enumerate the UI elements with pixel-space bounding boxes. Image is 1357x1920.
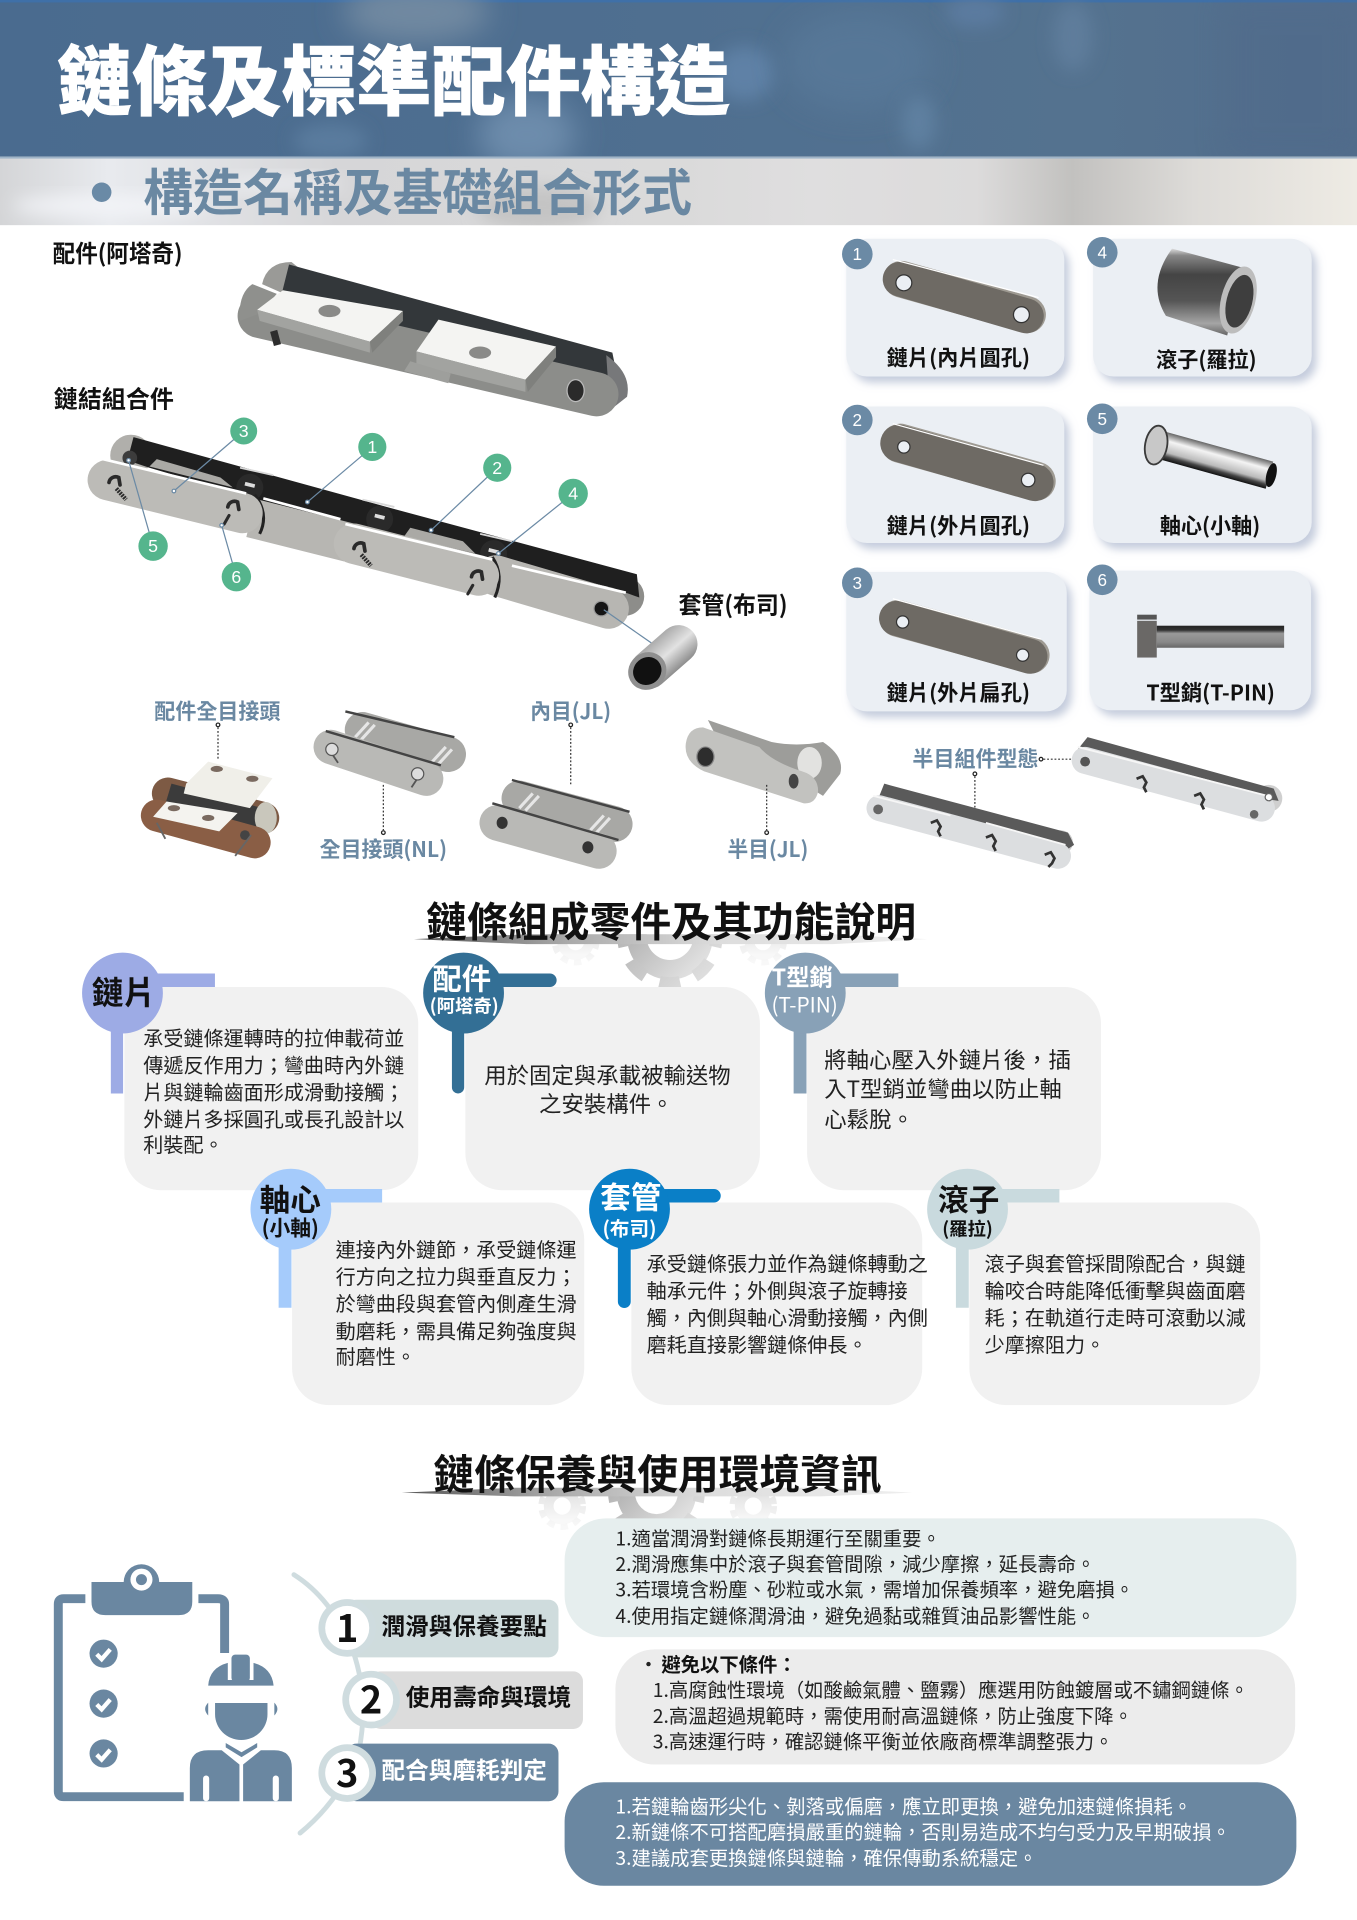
feature card: attachment: (阿塔奇) <box>430 993 499 1019</box>
feature card: T-pin: T型銷 <box>772 959 833 993</box>
info panel: avoid conditions <box>615 1649 1295 1764</box>
card 4: 4 <box>1097 242 1107 262</box>
card 5 <box>1087 403 1312 543</box>
label: assembly: 鏈結組合件 <box>54 380 174 415</box>
info panel: avoid conditions: 避免以下條件： <box>661 1649 797 1677</box>
feature card: chain plate: 傳遞反作用力；彎曲時內外鏈 <box>143 1050 404 1079</box>
section 2 underline <box>414 934 927 944</box>
feature card: bushing: 觸，內側與軸心滑動接觸，內側 <box>647 1302 928 1331</box>
feature card: chain plate: 片與鏈輪齒面形成滑動接觸； <box>143 1077 404 1106</box>
callout numbers: 4 <box>568 484 578 504</box>
icon: clipboard and worker <box>58 1564 292 1801</box>
item 3: 配合與磨耗判定 <box>382 1752 547 1786</box>
feature card: bushing: 軸承元件；外側與滾子旋轉接 <box>647 1275 908 1304</box>
header banner <box>0 0 1357 171</box>
info panel: replacement: 1.若鏈輪齒形尖化、剝落或偏磨，應立即更換，避免加速鏈條損耗。 <box>615 1791 1192 1819</box>
item 1: 潤滑與保養要點 <box>382 1608 547 1642</box>
part: attachment full joint <box>153 762 277 856</box>
info panel: replacement <box>565 1782 1296 1886</box>
item 3 <box>318 1743 558 1802</box>
section 2 heading: 鏈條組成零件及其功能說明 <box>426 890 916 949</box>
info panel: lubrication: 3.若環境含粉塵、砂粒或水氣，需增加保養頻率，避免磨損。 <box>615 1575 1134 1603</box>
label: half link assemblies: 半目組件型態 <box>912 743 1039 774</box>
label: half link assemblies <box>912 743 1073 808</box>
card 5: 5 <box>1097 409 1107 429</box>
info panel: lubrication <box>565 1518 1296 1637</box>
feature card: T-pin: (T-PIN) <box>771 989 838 1019</box>
part: half link chain right <box>1078 737 1282 819</box>
info panel: avoid conditions: 3.高速運行時，確認鏈條平衡並依廠商標準調整張力。 <box>653 1727 1113 1755</box>
feature card: attachment: 配件 <box>432 956 491 998</box>
info panel: avoid conditions: 1.高腐蝕性環境（如酸鹼氣體、鹽霧）應選用防蝕鍍層或不鏽鋼鏈條。 <box>653 1675 1249 1703</box>
feature card: bushing: 套管 <box>600 1173 661 1218</box>
feature card: T-pin <box>765 953 1101 1190</box>
section 3 underline <box>402 1488 912 1496</box>
feature card: pin: 動磨耗，需具備足夠強度與 <box>336 1315 577 1344</box>
section 3 heading: 鏈條保養與使用環境資訊 <box>434 1442 882 1501</box>
card 4: 滾子(羅拉) <box>1156 343 1257 374</box>
feature card: pin: 於彎曲段與套管內側產生滑 <box>336 1288 577 1317</box>
item 3: 3 <box>336 1743 358 1798</box>
part: half link JL <box>686 720 841 803</box>
card 2: 鏈片(外片圓孔) <box>887 509 1030 540</box>
label: inner link JL <box>530 695 611 785</box>
cards panel <box>842 237 1312 711</box>
feature card: chain plate: 外鏈片多採圓孔或長孔設計以 <box>143 1104 404 1133</box>
card 6 <box>1087 564 1311 710</box>
feature card: T-pin: 入T型銷並彎曲以防止軸 <box>824 1072 1062 1104</box>
info panel: lubrication: 1.適當潤滑對鏈條長期運行至關重要。 <box>615 1523 941 1551</box>
card 3 <box>842 568 1067 711</box>
label: attachment full joint <box>154 695 281 759</box>
item 2: 使用壽命與環境 <box>406 1679 571 1713</box>
label: attachment full joint: 配件全目接頭 <box>154 695 281 726</box>
item 1: 1 <box>336 1598 358 1653</box>
card 1 <box>842 239 1064 377</box>
subtitle band <box>0 157 1357 230</box>
subtitle: 構造名稱及基礎組合形式 <box>143 154 692 226</box>
callout numbers: 3 <box>239 421 249 441</box>
label: inner link JL: 內目(JL) <box>530 695 611 726</box>
feature card: roller <box>927 1169 1260 1405</box>
feature card: attachment <box>423 953 760 1190</box>
card 3: 3 <box>853 573 862 593</box>
subtitle bullet <box>92 182 111 202</box>
item 2: 2 <box>360 1670 382 1725</box>
label: full joint NL <box>320 785 447 864</box>
label: half link JL <box>727 785 808 864</box>
card 1: 鏈片(內片圓孔) <box>887 342 1030 373</box>
callout numbers: 5 <box>148 536 158 556</box>
part: half link chain left <box>873 784 1074 867</box>
feature card: pin: 軸心 <box>260 1175 321 1220</box>
label: half link JL: 半目(JL) <box>727 833 808 864</box>
card 5: 軸心(小軸) <box>1160 509 1260 540</box>
feature card: roller: 滾子與套管採間隙配合，與鏈 <box>985 1248 1246 1277</box>
feature card: T-pin: 心鬆脫。 <box>824 1103 914 1135</box>
feature card: pin: (小軸) <box>262 1212 319 1242</box>
feature card: attachment: 之安裝構件。 <box>539 1087 673 1119</box>
callout numbers: 6 <box>231 567 241 587</box>
feature card: attachment: 用於固定與承載被輸送物 <box>484 1059 731 1091</box>
feature card: roller: 耗；在軌道行走時可滾動以減 <box>985 1302 1246 1331</box>
callout numbers <box>138 418 588 591</box>
info panel: lubrication: 2.潤滑應集中於滾子與套管間隙，減少摩擦，延長壽命。 <box>615 1549 1095 1577</box>
feature card: bushing: (布司) <box>603 1213 656 1242</box>
card 4 <box>1087 237 1312 377</box>
feature card: pin <box>250 1169 584 1405</box>
bushing <box>620 644 678 698</box>
title: 鏈條及標準配件構造 <box>58 21 730 131</box>
feature card: bushing: 承受鏈條張力並作為鏈條轉動之 <box>647 1248 928 1277</box>
card 2: 2 <box>853 410 862 430</box>
info panel: avoid conditions: 2.高溫超過規範時，需使用耐高溫鏈條，防止強度下降。 <box>653 1701 1133 1729</box>
item 2 <box>342 1670 583 1729</box>
callouts <box>127 431 656 647</box>
part: inner link JL <box>492 780 630 853</box>
section 2 gears <box>527 882 808 983</box>
feature card: bushing: 磨耗直接影響鏈條伸長。 <box>647 1329 868 1358</box>
section 3 gears <box>527 1433 796 1536</box>
card 6: T型銷(T-PIN) <box>1146 676 1275 707</box>
card 1: 1 <box>853 244 862 264</box>
callout numbers: 2 <box>492 458 502 478</box>
feature card: roller: 輪咬合時能降低衝擊與齒面磨 <box>985 1275 1246 1304</box>
feature card: chain plate <box>82 953 418 1190</box>
label: bushing: 套管(布司) <box>678 585 788 620</box>
link assembly chain illustration <box>98 435 644 616</box>
feature card: chain plate: 鏈片 <box>92 968 156 1014</box>
feature card: pin: 耐磨性。 <box>336 1341 416 1370</box>
feature card: pin: 連接內外鏈節，承受鏈條運 <box>336 1234 577 1263</box>
attachment chain illustration <box>240 262 628 410</box>
info panel: replacement: 3.建議成套更換鏈條與鏈輪，確保傳動系統穩定。 <box>615 1843 1037 1871</box>
item 1 <box>318 1598 558 1657</box>
feature card: chain plate: 利裝配。 <box>143 1129 224 1158</box>
feature card: bushing <box>589 1169 928 1405</box>
info panel: lubrication: 4.使用指定鏈條潤滑油，避免過黏或雜質油品影響性能。 <box>615 1601 1095 1629</box>
feature card: T-pin: 將軸心壓入外鏈片後，插 <box>824 1043 1071 1075</box>
feature card: roller: 少摩擦阻力。 <box>985 1329 1105 1358</box>
label: full joint NL: 全目接頭(NL) <box>320 833 447 864</box>
card 6: 6 <box>1097 570 1107 590</box>
callout numbers: 1 <box>367 437 377 457</box>
feature card: roller: (羅拉) <box>942 1216 993 1242</box>
feature card: roller: 滾子 <box>938 1175 999 1220</box>
feature card: chain plate: 承受鏈條運轉時的拉伸載荷並 <box>143 1023 404 1052</box>
feature card: pin: 行方向之拉力與垂直反力； <box>336 1261 577 1290</box>
info panel: replacement: 2.新鏈條不可搭配磨損嚴重的鏈輪，否則易造成不均勻受力及早期破損。 <box>615 1817 1231 1845</box>
card 2 <box>842 405 1064 543</box>
label: attachment: 配件(阿塔奇) <box>53 234 182 269</box>
part: full joint NL <box>326 711 454 787</box>
arc connector <box>294 1575 363 1833</box>
card 3: 鏈片(外片扁孔) <box>887 676 1030 707</box>
